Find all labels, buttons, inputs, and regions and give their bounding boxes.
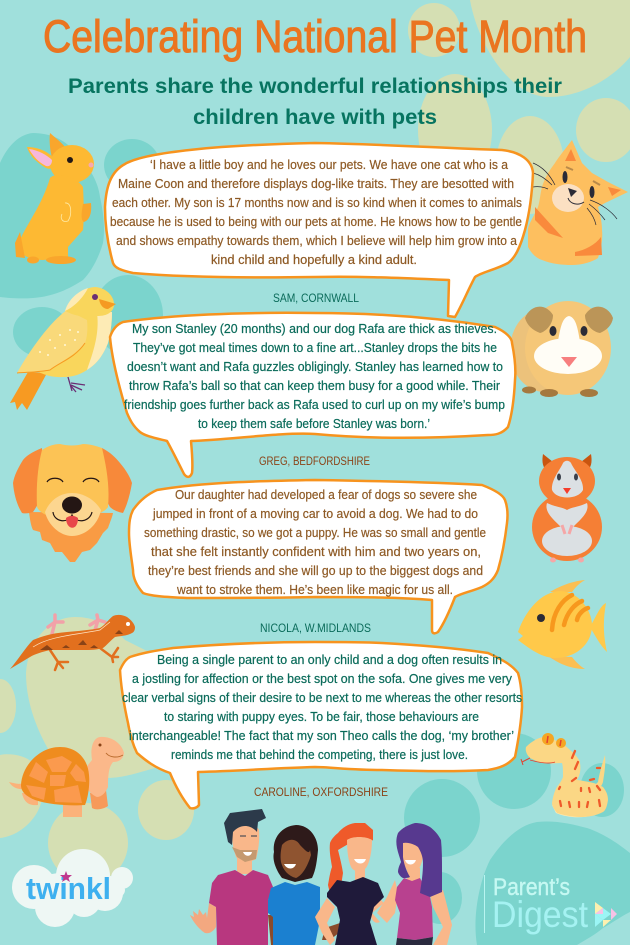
logo: Parent's Digest: Digest [492,894,589,935]
quote 3 text: that she felt instantly confident with him and two years on, [151,545,481,559]
quote 2 text [124,322,505,431]
subtitle: Parents share the wonderful relationships their [68,75,562,98]
quote 1 text: kind child and hopefully a kind adult. [211,253,417,267]
quote 3 text: want to stroke them. He’s been like magic for us all. [176,583,453,597]
quote 2 text: throw Rafa’s ball so that can keep them busy for a good while. Their [129,379,500,393]
person: woman in blue [268,825,320,945]
quote 3 text: jumped in front of a moving car to avoid a dog. We had to do [152,507,478,521]
illustration: four adults [190,809,452,945]
quote 1 text: Maine Coon and therefore displays dog-like traits. They are besotted with [118,177,514,191]
quote 3 text: Our daughter had developed a fear of dogs so severe she [175,488,477,502]
quote 4 text: interchangeable! The fact that my son Theo calls the dog, ‘my brother’ [129,729,514,743]
quote 4 text: clear verbal signs of their desire to be next to me whereas the other resorts [122,691,522,705]
quote 4 text: Being a single parent to an only child and a dog often results in [157,653,502,667]
icon: hamster [532,454,602,562]
quote 1 text: each other. My son is 17 months now and is so kind when it comes to animals [112,196,522,210]
person: man [190,809,273,945]
quote 3 text: they’re best friends and she will go up to the biggest dogs and [148,564,483,578]
attribution: Nicola: NICOLA, W.MIDLANDS [260,621,371,635]
quote 2 text: friendship goes further back as Rafa used to curl up on my wife’s bump [124,398,505,412]
quote 4 text: a jostling for affection or the best spot on the sofa. One gives me very [132,672,513,686]
icon: lizard [10,615,135,670]
quote 2 text: My son Stanley (20 months) and our dog Rafa are thick as thieves. [132,322,497,336]
logo: Twinkl: twinkl [26,871,111,906]
attribution: Sam: SAM, CORNWALL [273,291,359,305]
quote 2 text: They’ve got meal times down to a fine art...Stanley drops the bits he [133,341,497,355]
person: woman in navy [315,823,384,945]
logo: Twinkl [12,849,133,927]
icon: snake [521,733,608,817]
quote 1 text [110,158,522,267]
attribution: Caroline: CAROLINE, OXFORDSHIRE [254,785,388,799]
quote 1 text: and shows empathy towards them, which I believe will help him grow into a [116,234,517,248]
quote 4 text: reminds me that behind the competing, there is just love. [171,748,468,762]
icon: tortoise [9,737,124,817]
person: woman in pink [377,823,452,945]
speech bubble 3 [129,480,508,633]
icon: dog [13,444,132,562]
speech bubble 1 [105,143,533,317]
logo: Parent's Digest [484,874,617,935]
quote 2 text: doesn’t want and Rafa guzzles obligingly. Stanley has learned how to [127,360,503,374]
quote 4 text: to staring with puppy eyes. To be fair, those behaviours are [164,710,479,724]
speech bubble 2 [110,313,515,477]
icon: guinea pig [510,301,613,397]
logo: Parent's Digest: Parent’s [493,874,570,901]
icon: bird [10,287,116,410]
attribution: Greg: GREG, BEDFORDSHIRE [259,454,370,468]
subtitle: children have with pets [193,106,437,129]
speech bubble 4 [120,642,522,808]
icon: fish [518,580,607,669]
quote 1 text: ‘I have a little boy and he loves our pets. We have one cat who is a [150,158,508,172]
quote 1 text: because he is used to being with our pets at home. He knows how to be gentle [110,215,522,229]
icon: cat [528,140,628,265]
quote 3 text: something drastic, so we got a puppy. He was so small and gentle [144,526,486,540]
icon: rabbit [15,133,94,264]
quote 3 text [144,488,486,597]
quote 4 text [122,653,522,762]
quote 2 text: to keep them safe before Stanley was born.’ [198,417,430,431]
subtitle [68,75,562,129]
